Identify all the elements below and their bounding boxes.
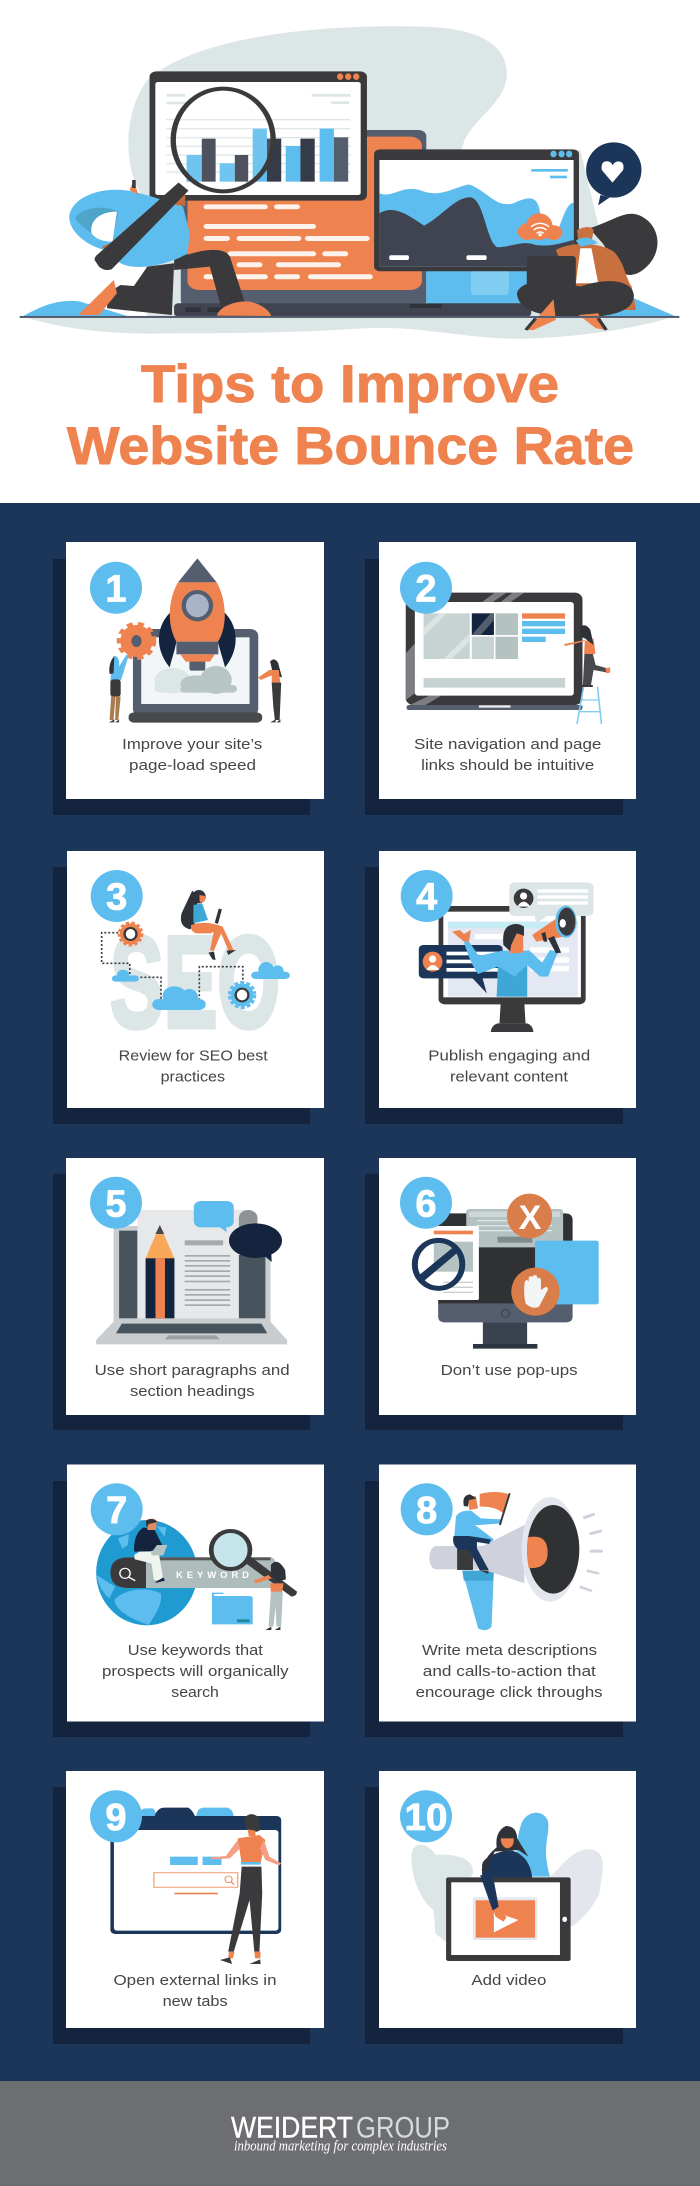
tip text bbox=[119, 1048, 269, 1086]
icon: heart bubble bbox=[586, 142, 641, 205]
laptop behind bbox=[174, 130, 533, 317]
tip text: section headings bbox=[130, 1383, 254, 1400]
illustration: globe and keyword search bbox=[96, 1519, 297, 1630]
badge: 6 bbox=[400, 1177, 452, 1229]
icon: X: X bbox=[519, 1199, 542, 1237]
tip text: Open external links in bbox=[114, 1972, 276, 1989]
badge: 2 bbox=[400, 562, 452, 614]
panel: tip 10 bbox=[365, 1771, 636, 2044]
logo bbox=[231, 2112, 450, 2145]
tip text: Site navigation and page bbox=[414, 736, 601, 753]
badge: 4: 4 bbox=[416, 876, 437, 918]
illustration: SEO letters: SEO bbox=[110, 909, 280, 1055]
wave chart window bbox=[374, 149, 579, 271]
tip text: Don’t use pop-ups bbox=[441, 1362, 578, 1379]
person with laptop bbox=[517, 214, 657, 330]
panel: tip 6 bbox=[365, 1158, 636, 1430]
tip text bbox=[114, 1972, 276, 2010]
tip text: and calls-to-action that bbox=[423, 1663, 597, 1680]
illustration: laptop with pencil and document bbox=[96, 1201, 287, 1344]
panel: tip 5 bbox=[53, 1158, 324, 1430]
badge: 9 bbox=[90, 1790, 142, 1842]
tip text: relevant content bbox=[450, 1069, 569, 1086]
panel: tip 3 bbox=[53, 851, 324, 1124]
tip text bbox=[102, 1642, 289, 1701]
tip text: Improve your site’s bbox=[122, 736, 262, 753]
navy section background bbox=[0, 503, 700, 2081]
ground blue shapes bbox=[22, 298, 676, 317]
tip text: Publish engaging and bbox=[428, 1048, 590, 1065]
background blob bbox=[22, 26, 674, 339]
badge: 7 bbox=[91, 1483, 143, 1535]
tip text bbox=[414, 736, 601, 774]
badge: 8 bbox=[401, 1483, 453, 1535]
illustration: monitor with pop-ups bbox=[415, 1194, 599, 1349]
panel: tip 1 bbox=[53, 542, 324, 815]
tip text: new tabs bbox=[163, 1993, 228, 2010]
ground line bbox=[20, 316, 679, 318]
badge: 10 bbox=[400, 1790, 452, 1842]
badge: 1: 1 bbox=[105, 568, 127, 610]
panel: tip 8 bbox=[365, 1464, 636, 1737]
badge: 5 bbox=[90, 1177, 142, 1229]
text lines on orange panel bbox=[204, 204, 373, 279]
badge: 10: 10 bbox=[404, 1797, 448, 1839]
badge: 3 bbox=[91, 870, 143, 922]
tip text: Use short paragraphs and bbox=[95, 1362, 290, 1379]
tip text: Use keywords that bbox=[128, 1642, 264, 1659]
title bbox=[67, 355, 634, 476]
footer bbox=[0, 2081, 700, 2186]
illustration: rocket and laptop bbox=[109, 558, 282, 723]
badge: 9: 9 bbox=[105, 1797, 127, 1839]
icon: magnifying glass bbox=[95, 89, 273, 270]
tip text: practices bbox=[161, 1069, 225, 1086]
hero illustration bbox=[20, 26, 679, 339]
badge: 7: 7 bbox=[106, 1490, 127, 1532]
logo: GROUP bbox=[356, 2112, 450, 2145]
logo: WEIDERT bbox=[231, 2112, 353, 2145]
badge: 1 bbox=[90, 562, 142, 614]
tip text bbox=[416, 1642, 603, 1701]
illustration: megaphone and person bbox=[429, 1492, 603, 1630]
badge: 4 bbox=[401, 870, 453, 922]
panel: tip 2 bbox=[365, 542, 636, 815]
title: Tips to Improve bbox=[141, 355, 559, 414]
bar chart window bbox=[150, 71, 367, 201]
badge: 5: 5 bbox=[105, 1184, 127, 1226]
illustration: monitor with presenter bbox=[419, 882, 594, 1032]
panel: tip 4 bbox=[365, 851, 636, 1124]
tip text: Review for SEO best bbox=[119, 1048, 269, 1065]
tip text: encourage click throughs bbox=[416, 1684, 603, 1701]
tip text bbox=[428, 1048, 590, 1086]
tip text: Add video bbox=[471, 1972, 546, 1989]
tip text bbox=[122, 736, 262, 774]
badge: 2: 2 bbox=[415, 568, 437, 610]
icon: wifi cloud bbox=[518, 213, 562, 240]
illustration: laptop with person on ladder bbox=[406, 593, 610, 724]
title: Website Bounce Rate bbox=[67, 417, 634, 476]
illustration: browser window and person bbox=[110, 1808, 281, 1964]
panel: tip 7 bbox=[53, 1464, 324, 1737]
tip text: links should be intuitive bbox=[421, 757, 594, 774]
illustration: gears clouds and person bbox=[102, 890, 290, 1010]
badge: 8: 8 bbox=[416, 1490, 437, 1532]
badge: 6: 6 bbox=[415, 1184, 437, 1226]
keyword label: KEYWORD bbox=[176, 1570, 249, 1581]
badge: 3: 3 bbox=[106, 876, 127, 918]
tip text: page-load speed bbox=[129, 757, 256, 774]
person with magnifier bbox=[69, 180, 271, 316]
tip text bbox=[95, 1362, 290, 1400]
tip text: Write meta descriptions bbox=[422, 1642, 597, 1659]
tagline: inbound marketing for complex industries bbox=[234, 2139, 447, 2155]
tip text: prospects will organically bbox=[102, 1663, 289, 1680]
panel: tip 9 bbox=[53, 1771, 324, 2044]
tip text: search bbox=[171, 1684, 219, 1701]
illustration: tablet video and person bbox=[411, 1813, 603, 1961]
